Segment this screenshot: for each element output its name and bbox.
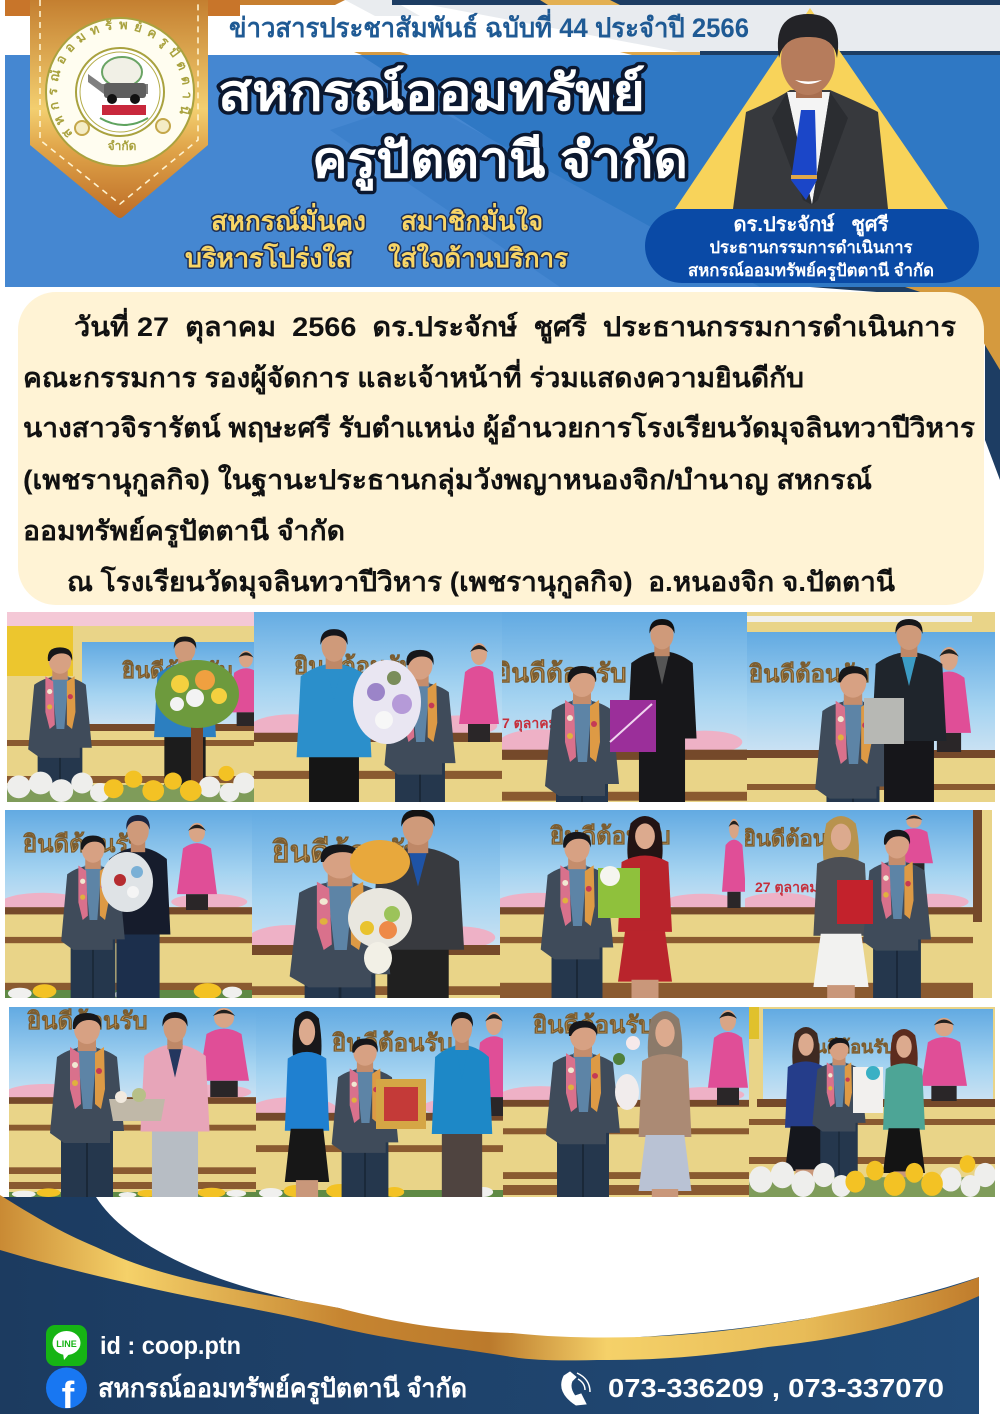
header blue band — [5, 55, 1000, 287]
slogans: บริหารโปร่งใส — [185, 242, 352, 273]
slogans: สหกรณ์มั่นคง — [211, 202, 366, 236]
news text panel — [18, 292, 984, 605]
phone numbers: 073-336209 , 073-337070 — [608, 1373, 944, 1403]
facebook name: สหกรณ์ออมทรัพย์ครูปัตตานี จำกัด — [98, 1373, 467, 1405]
newsletter heading: ข่าวสารประชาสัมพันธ์ ฉบับที่ 44 ประจำปี 2566 — [229, 8, 749, 43]
photo 8: red gift, white skirt: ยินดีต้อนรับ — [743, 826, 854, 851]
news text panel: ณ โรงเรียนวัดมุจลินทวาปีวิหาร (เพชรานุกูลกิจ) อ.หนองจิก จ.ปัตตานี — [67, 565, 896, 599]
photo 7: green gift, red dress — [500, 810, 745, 998]
photo 11: orchid, woman in hijab — [503, 1007, 749, 1197]
slogans: ใส่ใจด้านบริการ — [388, 243, 568, 273]
icon: facebook — [46, 1368, 87, 1414]
photo 8: red gift, white skirt: 27 ตุลาคม 2566 — [755, 879, 854, 896]
news text panel: วันที่ 27 ตุลาคม 2566 ดร.ประจักษ์ ชูศรี ประธานกรรมการดำเนินการ — [74, 307, 957, 344]
photo 4: silver gift: ยินดีต้อนรับ — [749, 661, 870, 688]
co-op name title: ครูปัตตานี จำกัด — [312, 132, 688, 191]
photo 5: bouquet, man in cap: ยินดีต้อนรับ — [23, 831, 144, 858]
news text panel: (เพชรานุกูลกิจ) ในฐานะประธานกลุ่มวังพญาหนองจิก/บำนาญ สหกรณ์ — [23, 464, 872, 498]
icon: phone — [562, 1372, 590, 1405]
photo 8: red gift, white skirt — [743, 810, 992, 998]
photo 3: purple gift: 7 ตุลาคม 2566 — [502, 715, 593, 732]
photo 10: framed garuda — [256, 1007, 503, 1197]
photo 7: green gift, red dress: ยินดีต้อนรับ — [550, 823, 671, 850]
photo 11: orchid, woman in hijab: ยินดีต้อนรับ — [533, 1012, 654, 1039]
photo 1: speaker at podium — [7, 612, 254, 802]
news text panel: ออมทรัพย์ครูปัตตานี จำกัด — [23, 515, 345, 548]
chairman portrait — [675, 8, 948, 209]
ribbon badge — [5, 0, 240, 218]
logo seal: สหกรณ์ออมทรัพย์ครูปัตตานี — [48, 20, 191, 138]
icon: line — [46, 1325, 87, 1366]
photo 10: framed garuda: ยินดีต้อนรับ — [332, 1030, 453, 1057]
photo 12: three people, flowers — [749, 1007, 995, 1197]
photo 2: bouquet with man in blue — [254, 612, 502, 802]
chairman name pill: ดร.ประจักษ์ ชูศรี — [734, 213, 889, 238]
news text panel: คณะกรรมการ รองผู้จัดการ และเจ้าหน้าที่ ร่วมแสดงความยินดีกับ — [23, 358, 804, 395]
chairman name pill: สหกรณ์ออมทรัพย์ครูปัตตานี จำกัด — [688, 260, 934, 282]
gold ribbon — [0, 1195, 979, 1360]
photo 3: purple gift — [496, 612, 747, 802]
news text panel: นางสาวจิรารัตน์ พฤษะศรี รับตำแหน่ง ผู้อำนวยการโรงเรียนวัดมุจลินทวาปีวิหาร — [23, 411, 976, 445]
photo 9: gift basket: ยินดีต้อนรับ — [27, 1008, 148, 1035]
photo 1: speaker at podium: ยินดีต้อนรับ — [122, 658, 233, 683]
slogans — [185, 202, 568, 273]
photo 3: purple gift: ยินดีต้อนรับ — [496, 658, 627, 688]
logo seal: จำกัด — [108, 139, 137, 153]
chairman name pill — [645, 209, 979, 283]
photo 12: three people, flowers: ยินดีต้อนรับ — [804, 1037, 894, 1057]
photo 6: large vase bouquet — [252, 810, 500, 998]
chairman name pill: ประธานกรรมการดำเนินการ — [710, 238, 913, 257]
photo 6: large vase bouquet: ยินดีต้อนรับ — [272, 836, 423, 869]
photo 4: silver gift — [747, 612, 995, 802]
photo 5: bouquet, man in cap — [5, 810, 252, 998]
co-op name title — [218, 65, 688, 191]
right corner accent — [810, 287, 1000, 480]
icon: line: LINE — [56, 1339, 77, 1349]
co-op name title: สหกรณ์ออมทรัพย์ — [218, 65, 645, 121]
line id: id : coop.ptn — [100, 1332, 241, 1360]
slogans: สมาชิกมั่นใจ — [401, 202, 543, 236]
photo 2: bouquet with man in blue: ยินดีต้อนรับ — [294, 653, 415, 680]
top stripes — [0, 0, 1000, 287]
footer wave — [0, 1195, 979, 1414]
photo 9: gift basket — [9, 1007, 256, 1197]
